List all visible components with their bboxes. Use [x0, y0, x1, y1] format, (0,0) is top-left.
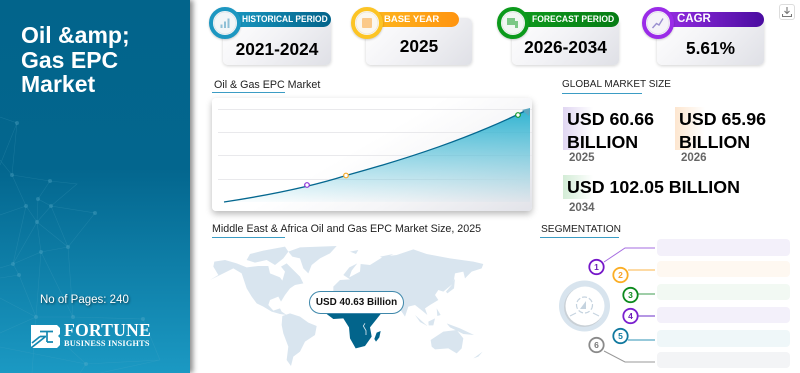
- icon: logo mark: [31, 325, 60, 348]
- card body: [223, 18, 331, 65]
- card: CAGR: [641, 7, 766, 68]
- value: 2025: [400, 36, 438, 56]
- label pill: [657, 12, 764, 27]
- page count: No of Pages: 240: [40, 294, 129, 306]
- node 1: 1: [594, 262, 599, 272]
- swatch: [563, 107, 593, 150]
- year: 2034: [569, 202, 595, 214]
- segment row 2: [657, 261, 790, 277]
- logo wordmark: BUSINESS INSIGHTS: [64, 339, 150, 348]
- heading: regional map: Middle East & Africa Oil and Gas EPC Market Size, 2025: [212, 223, 481, 235]
- logo wordmark: FORTUNE: [64, 320, 151, 340]
- label pill: [224, 12, 331, 27]
- node 6: 6: [594, 340, 599, 350]
- card body: [512, 18, 619, 65]
- segment row 5: [657, 330, 790, 347]
- icon ring: [351, 7, 383, 39]
- value: USD 65.96: [679, 109, 766, 129]
- value: [679, 109, 766, 152]
- icon ring: [497, 7, 529, 39]
- segment row 1: [657, 239, 790, 256]
- value: 5.61%: [686, 38, 735, 58]
- year: 2025: [569, 152, 595, 164]
- panel: growth chart: [212, 98, 532, 211]
- value: 2026-2034: [524, 37, 607, 57]
- label pill: [366, 12, 459, 27]
- title: [21, 22, 130, 97]
- label pill: FORECAST PERIOD: [532, 14, 614, 25]
- central hub: [559, 280, 610, 332]
- value: [567, 109, 654, 152]
- segment row 4: [657, 307, 790, 323]
- value: USD 102.05 BILLION: [567, 177, 740, 197]
- panel: sidebar: [0, 0, 190, 373]
- year: 2026: [681, 152, 707, 164]
- label pill: BASE YEAR: [384, 14, 439, 25]
- label pill: [512, 12, 619, 27]
- heading: segmentation: SEGMENTATION: [541, 224, 621, 235]
- heading: global market size: GLOBAL MARKET SIZE: [562, 79, 671, 90]
- title: Gas EPC: [21, 46, 118, 72]
- logo: [31, 320, 151, 348]
- Eurasia and Oceania: [333, 249, 483, 358]
- node 2: 2: [618, 270, 623, 280]
- segment row 6: [657, 352, 790, 368]
- callout: regional value: USD 40.63 Billion: [316, 297, 397, 308]
- card body: [657, 18, 764, 65]
- value: USD 60.66: [567, 109, 654, 129]
- label pill: CAGR: [677, 13, 711, 25]
- card: base year: [350, 7, 474, 68]
- node 4: 4: [628, 311, 633, 321]
- heading: market chart: Oil & Gas EPC Market: [214, 79, 320, 91]
- node 3: 3: [628, 290, 633, 300]
- connectors: [604, 248, 655, 362]
- world map: [211, 246, 484, 366]
- stat: 2026 market size: [675, 107, 766, 164]
- value: 2021-2024: [236, 39, 318, 59]
- title: Oil &amp;: [21, 22, 130, 48]
- highlighted region: Middle East & Africa: [327, 307, 382, 348]
- icon: download: [779, 4, 795, 20]
- swatch: [675, 107, 705, 150]
- stat: 2025 market size: [563, 107, 654, 164]
- value: BILLION: [679, 132, 750, 152]
- callout: regional value: [309, 291, 404, 314]
- node 5: 5: [618, 331, 623, 341]
- network background: [0, 117, 160, 373]
- card: forecast period: [496, 7, 620, 68]
- swatch: [563, 175, 593, 199]
- card: historical period: [208, 7, 332, 68]
- icon ring: [209, 7, 241, 39]
- segment row 3: [657, 284, 790, 300]
- area chart: [218, 108, 532, 203]
- stat: 2034 market size: [563, 175, 740, 214]
- label pill: HISTORICAL PERIOD: [242, 14, 328, 25]
- icon ring: [642, 7, 674, 39]
- Americas and Greenland: [210, 246, 337, 366]
- card body: [366, 18, 472, 65]
- title: Market: [21, 71, 95, 97]
- value: BILLION: [567, 132, 638, 152]
- segmentation diagram: [559, 248, 655, 362]
